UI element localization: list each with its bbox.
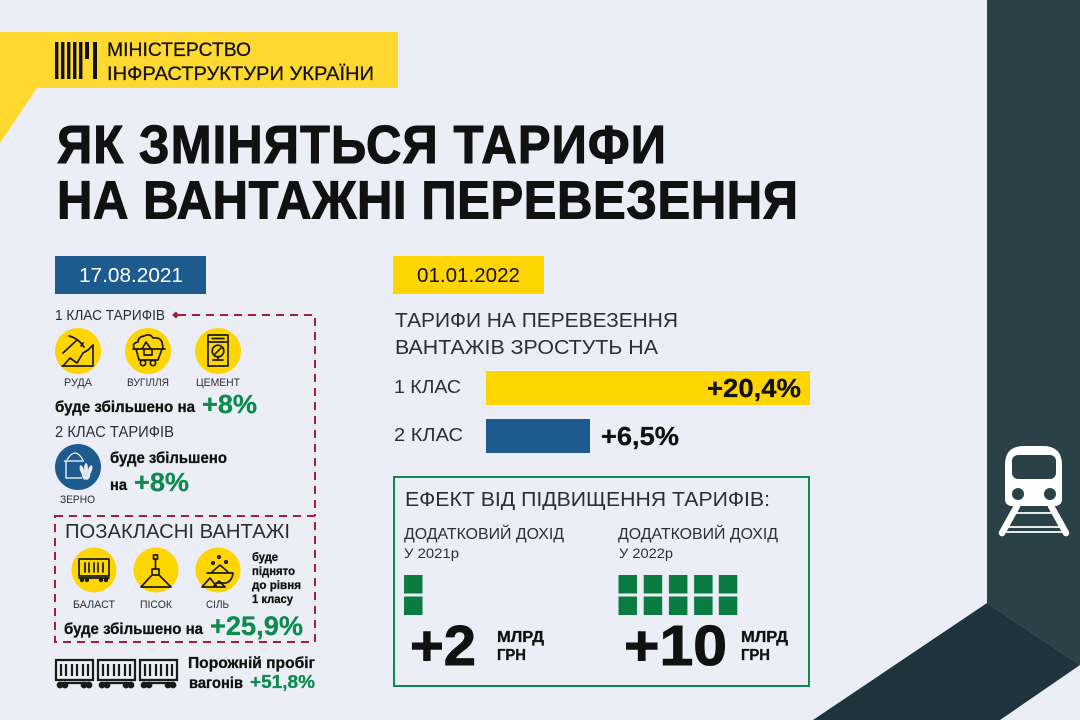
panel: effect of tariff increase bbox=[394, 477, 809, 686]
raised to class 1 note: піднято bbox=[252, 564, 295, 578]
extra-class heading: ПОЗАКЛАСНІ ВАНТАЖІ bbox=[65, 521, 290, 543]
ministry name: ІНФРАСТРУКТУРИ УКРАЇНИ bbox=[107, 64, 374, 85]
grain label: ЗЕРНО bbox=[60, 494, 95, 506]
title: ЯК ЗМІНЯТЬСЯ ТАРИФИ bbox=[57, 115, 666, 174]
bar: class 2: 2 КЛАС bbox=[394, 425, 463, 445]
revenue 2022 caption: ДОДАТКОВИЙ ДОХІД bbox=[618, 525, 779, 543]
icon: sand bbox=[134, 548, 178, 592]
panel: tariff class 1 bbox=[55, 308, 257, 419]
raised to class 1 note: буде bbox=[252, 550, 278, 564]
bar: class 2 bbox=[394, 419, 679, 453]
extra-class increase bbox=[64, 611, 303, 641]
date badge: 17.08.2021 bbox=[55, 256, 206, 294]
icon: three empty wagons bbox=[56, 660, 177, 687]
bar chart: tariff growth bbox=[394, 371, 810, 453]
value +2: +2 bbox=[410, 614, 476, 678]
revenue 2021 caption: ДОДАТКОВИЙ ДОХІД bbox=[404, 525, 565, 543]
date badge: 01.01.2022: 01.01.2022 bbox=[417, 265, 520, 287]
class 1 heading: 1 КЛАС ТАРИФІВ bbox=[55, 308, 165, 324]
extra-class increase: +25,9% bbox=[210, 611, 303, 641]
icon: ballast wagon bbox=[72, 548, 116, 592]
revenue 2022 caption bbox=[618, 525, 779, 561]
class 2 increase: на bbox=[110, 477, 127, 494]
tariffs heading: ВАНТАЖІВ ЗРОСТУТЬ НА bbox=[395, 337, 659, 359]
icon: cement bag bbox=[195, 328, 241, 374]
bar: class 2: +6,5% bbox=[601, 421, 679, 451]
revenue 2021 caption bbox=[404, 525, 565, 561]
icon: ministry logo bars bbox=[55, 42, 97, 79]
unit squares 2021 bbox=[404, 575, 422, 615]
tariffs heading: ТАРИФИ НА ПЕРЕВЕЗЕННЯ bbox=[395, 310, 678, 332]
icon: salt bbox=[196, 548, 240, 592]
column: revenue 2021 bbox=[404, 525, 565, 678]
ore label: РУДА bbox=[64, 377, 93, 389]
unit: bn uah bbox=[497, 629, 544, 664]
dashed connector arrow bbox=[172, 312, 315, 516]
date badge: 17.08.2021: 17.08.2021 bbox=[79, 265, 183, 287]
effect heading: ЕФЕКТ ВІД ПІДВИЩЕННЯ ТАРИФІВ: bbox=[405, 489, 770, 511]
class 2 increase: буде збільшено bbox=[110, 450, 227, 467]
tariffs heading bbox=[395, 310, 678, 359]
bar: class 1 bbox=[394, 371, 810, 405]
date badge: 01.01.2022 bbox=[393, 256, 544, 294]
title: НА ВАНТАЖНІ ПЕРЕВЕЗЕННЯ bbox=[57, 171, 798, 230]
value +10: +10 bbox=[624, 614, 727, 678]
right dark side panel bbox=[813, 0, 1080, 720]
icon: grain bbox=[55, 444, 101, 490]
icon: coal cart bbox=[125, 328, 171, 374]
empty run text bbox=[188, 655, 316, 692]
empty run text: вагонів bbox=[189, 675, 243, 692]
ministry name: МІНІСТЕРСТВО bbox=[107, 40, 251, 61]
empty run text: Порожній пробіг bbox=[188, 655, 316, 672]
unit: bn uah bbox=[741, 629, 788, 664]
raised to class 1 note: 1 класу bbox=[252, 592, 293, 606]
bar: class 1: 1 КЛАС bbox=[394, 377, 461, 397]
panel: extra-class cargo bbox=[55, 516, 315, 642]
revenue 2021 caption: У 2021р bbox=[404, 545, 459, 561]
unit: bn uah: ГРН bbox=[497, 647, 526, 664]
raised to class 1 note: до рівня bbox=[252, 578, 301, 592]
icon: ore bbox=[55, 328, 101, 374]
panel: tariff class 2 bbox=[55, 424, 227, 506]
title bbox=[57, 115, 798, 230]
class 1 increase: буде збільшено на bbox=[55, 399, 195, 416]
empty run text: +51,8% bbox=[250, 672, 315, 692]
raised to class 1 note bbox=[252, 550, 301, 606]
class 2 increase bbox=[110, 450, 227, 497]
icon: train bbox=[1002, 446, 1066, 533]
unit: bn uah: МЛРД bbox=[497, 629, 544, 646]
sand label: ПІСОК bbox=[140, 599, 173, 611]
class 2 heading: 2 КЛАС ТАРИФІВ bbox=[55, 424, 174, 441]
ministry header banner bbox=[0, 32, 398, 143]
cement label: ЦЕМЕНТ bbox=[196, 377, 240, 389]
revenue 2022 caption: У 2022р bbox=[619, 545, 673, 561]
extra-class increase: буде збільшено на bbox=[64, 621, 203, 638]
coal label: ВУГІЛЛЯ bbox=[127, 377, 169, 389]
salt label: СІЛЬ bbox=[206, 599, 229, 611]
class 1 increase bbox=[55, 389, 257, 419]
bar: class 1: +20,4% bbox=[707, 373, 801, 403]
class 1 increase: +8% bbox=[202, 389, 257, 419]
unit: bn uah: ГРН bbox=[741, 647, 770, 664]
unit: bn uah: МЛРД bbox=[741, 629, 788, 646]
ministry name bbox=[107, 40, 374, 85]
unit squares 2022 bbox=[618, 575, 737, 615]
ballast label: БАЛАСТ bbox=[73, 599, 115, 611]
class 2 increase: +8% bbox=[134, 467, 189, 497]
column: revenue 2022 bbox=[618, 525, 788, 678]
